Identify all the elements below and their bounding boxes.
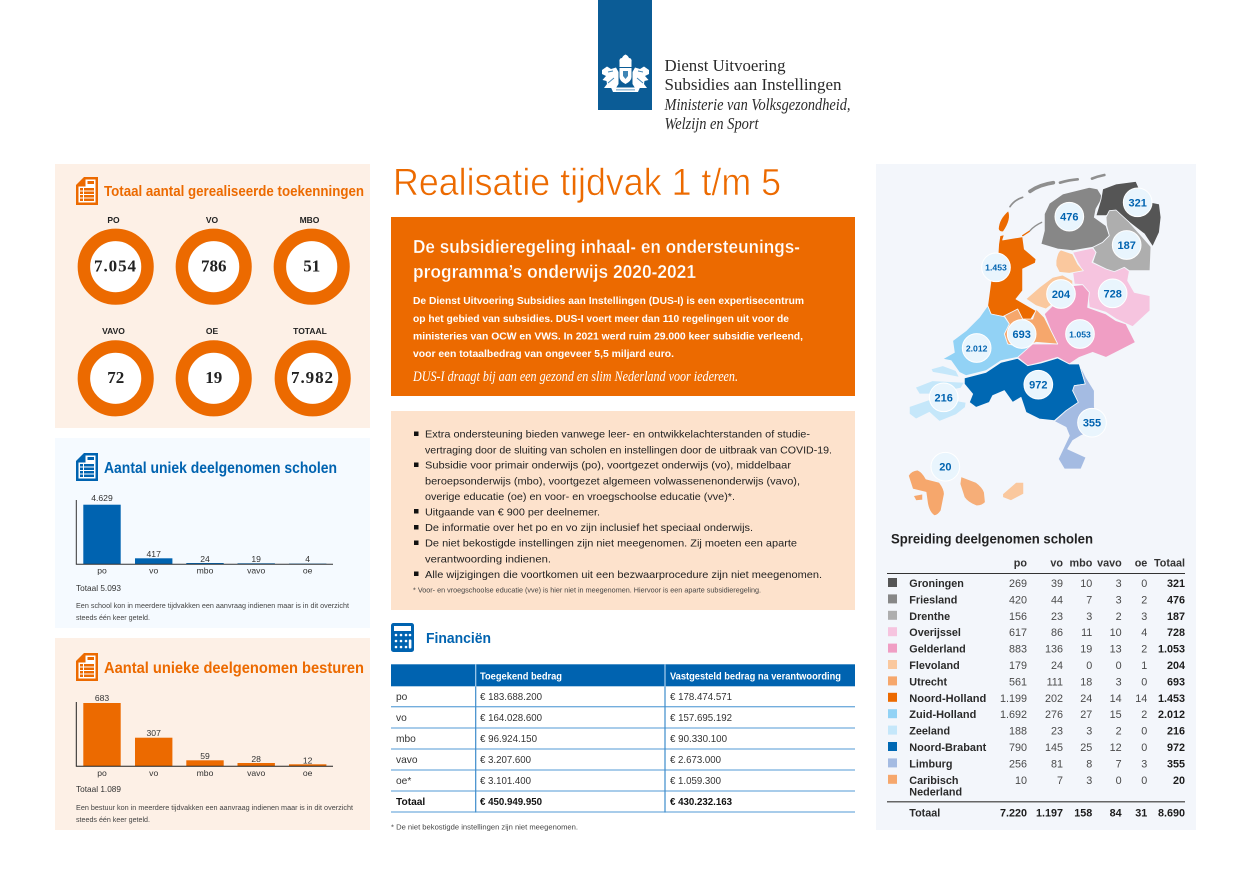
heading: regeling: De subsidieregeling inhaal- en ondersteunings-	[413, 236, 800, 257]
bar chart: scholen: vavo	[247, 566, 265, 576]
table: spreiding: 10	[1015, 775, 1027, 787]
table: spreiding: 2	[1141, 709, 1147, 721]
map value circles	[929, 188, 1152, 481]
table: spreiding: 0	[1141, 676, 1147, 688]
donut: PO	[84, 215, 148, 298]
map: Nederland: 1.453	[985, 263, 1007, 273]
table: financien: € 430.232.163	[670, 797, 732, 808]
icon: document blue	[76, 453, 98, 481]
heading: totaal aantal: Totaal aantal gerealiseerde toekenningen	[104, 183, 364, 200]
table: spreiding: 8.690	[1158, 808, 1185, 820]
table: spreiding: 216	[1167, 726, 1185, 738]
table: financien: € 157.695.192	[670, 713, 732, 724]
panel: spreiding	[876, 164, 1196, 830]
bar chart: besturen: 59	[200, 751, 210, 761]
donut: PO: 7.054	[94, 256, 136, 276]
bar chart: besturen: mbo	[197, 768, 214, 778]
logo text: organisation name: Ministerie van Volksgezondheid,	[664, 95, 850, 114]
donut: TOTAAL: TOTAAL	[293, 326, 327, 336]
table: spreiding: 0	[1116, 775, 1122, 787]
table: spreiding: Totaal	[1154, 558, 1185, 570]
text: totaal besturen: Totaal 1.089	[76, 784, 121, 794]
donut: OE	[182, 326, 246, 410]
table: spreiding: 2	[1116, 611, 1122, 623]
heading: regeling	[413, 236, 800, 282]
table: spreiding: 39	[1051, 578, 1063, 590]
table: spreiding: vo	[1050, 558, 1063, 570]
text: totaal scholen: Totaal 5.093	[76, 583, 121, 593]
table: spreiding: 693	[1167, 676, 1185, 688]
donut: VAVO	[84, 326, 148, 410]
table: spreiding: 14	[1110, 693, 1122, 705]
bullet list: Extra ondersteuning bieden vanwege leer- en ontwikkelachterstanden of studie-	[425, 430, 810, 441]
table: spreiding: 617	[1009, 627, 1027, 639]
table: spreiding: 10	[1110, 627, 1122, 639]
table: spreiding: 25	[1080, 742, 1092, 754]
table: spreiding: 136	[1045, 644, 1063, 656]
table: spreiding: 3	[1141, 611, 1147, 623]
table: financien: € 183.688.200	[480, 692, 542, 703]
panel: totaal aantal toekenningen	[55, 164, 370, 428]
table: spreiding: Friesland	[909, 594, 957, 606]
table: spreiding: 23	[1051, 611, 1063, 623]
table: spreiding: 202	[1045, 693, 1063, 705]
note: besturen: steeds één keer geteld.	[76, 815, 150, 824]
table: spreiding: 18	[1080, 676, 1092, 688]
table: spreiding: 13	[1110, 644, 1122, 656]
map: Nederland: 321	[1129, 197, 1147, 209]
table: spreiding: 0	[1141, 775, 1147, 787]
table: spreiding: 7.220	[1000, 808, 1027, 820]
donut: VO	[182, 215, 246, 298]
table: spreiding: 972	[1167, 742, 1185, 754]
table: spreiding: Drenthe	[909, 611, 950, 623]
table: spreiding: 81	[1051, 758, 1063, 770]
table: spreiding: 3	[1116, 676, 1122, 688]
table: spreiding: 20	[1173, 775, 1185, 787]
logo text: organisation name: Dienst Uitvoering	[664, 56, 786, 75]
logo: Rijksoverheid ribbon with crest	[598, 0, 652, 110]
table: spreiding: 3	[1086, 611, 1092, 623]
table: financien: € 164.028.600	[480, 713, 542, 724]
table: spreiding: Utrecht	[909, 676, 947, 688]
heading: scholen: Aantal uniek deelgenomen scholen	[104, 460, 337, 477]
bar chart: besturen	[76, 693, 333, 778]
bullet list: verantwoording indienen.	[425, 554, 551, 565]
table: spreiding: 1.197	[1036, 808, 1063, 820]
bar chart: besturen: po	[97, 768, 107, 778]
table: spreiding: 728	[1167, 627, 1185, 639]
map: Nederland: 204	[1052, 289, 1071, 301]
table: spreiding: 2	[1141, 644, 1147, 656]
bar chart: scholen: 24	[200, 554, 210, 564]
table: spreiding: mbo	[1070, 558, 1093, 570]
table: spreiding: 179	[1009, 660, 1027, 672]
map: Nederland: 216	[935, 392, 953, 404]
note: scholen: steeds één keer geteld.	[76, 613, 150, 622]
table: spreiding: 0	[1141, 742, 1147, 754]
panel: introductie oranje	[391, 217, 855, 396]
table: financien: € 2.673.000	[670, 755, 721, 766]
map: Nederland: 693	[1013, 329, 1031, 341]
bar chart: scholen	[76, 493, 333, 576]
logo text: organisation name	[664, 56, 850, 133]
bar chart: scholen: 417	[147, 549, 161, 559]
table: spreiding: Totaal	[909, 808, 940, 820]
table: spreiding: 4	[1141, 627, 1147, 639]
table: financien: Toegekend bedrag	[480, 672, 562, 682]
table: spreiding: 1.053	[1158, 644, 1185, 656]
table: spreiding: 3	[1086, 775, 1092, 787]
table: spreiding: 0	[1116, 660, 1122, 672]
icon: calculator	[391, 623, 414, 652]
donut: OE: 19	[205, 368, 222, 387]
note: scholen	[76, 601, 350, 622]
heading: besturen: Aantal unieke deelgenomen besturen	[104, 660, 364, 677]
panel: unieke scholen	[55, 438, 370, 628]
heading: financien: Financiën	[426, 630, 491, 647]
table: spreiding: 269	[1009, 578, 1027, 590]
footnote: financien: * De niet bekostigde instellingen zijn niet meegenomen.	[391, 822, 578, 832]
table: spreiding: 276	[1045, 709, 1063, 721]
map: Nederland: 187	[1118, 240, 1136, 252]
map: Nederland: 20	[939, 462, 951, 474]
bullet list: Uitgaande van € 900 per deelnemer.	[425, 508, 600, 519]
table: spreiding: 24	[1080, 693, 1092, 705]
logo text: organisation name: Subsidies aan Instellingen	[664, 75, 842, 94]
table: spreiding: 355	[1167, 758, 1185, 770]
table: financien	[391, 664, 855, 812]
map: Nederland: 476	[1060, 212, 1078, 224]
table: spreiding: 27	[1080, 709, 1092, 721]
table: spreiding: 321	[1167, 578, 1185, 590]
donut: MBO	[280, 215, 344, 298]
note: besturen	[76, 803, 354, 824]
table: spreiding: 2	[1141, 594, 1147, 606]
table: spreiding: 790	[1009, 742, 1027, 754]
table: spreiding: 3	[1116, 594, 1122, 606]
table: financien: po	[396, 692, 408, 703]
note: besturen: Een bestuur kon in meerdere tijdvakken een aanvraag indienen maar is in dit overzicht	[76, 803, 354, 812]
donut: OE: OE	[206, 326, 218, 336]
table: spreiding: 44	[1051, 594, 1063, 606]
table: spreiding: Nederland	[909, 786, 962, 798]
table: spreiding: Limburg	[909, 758, 952, 770]
bar chart: besturen: 12	[303, 756, 313, 766]
map: Nederland: 2.012	[966, 343, 988, 353]
table: spreiding: 10	[1080, 578, 1092, 590]
table: financien: Vastgesteld bedrag na verantwoording	[670, 672, 841, 682]
donut: VAVO: VAVO	[102, 326, 125, 336]
table: spreiding: 883	[1009, 644, 1027, 656]
table: spreiding: 145	[1045, 742, 1063, 754]
table: spreiding: 3	[1086, 726, 1092, 738]
wadden	[1010, 175, 1104, 236]
text: intro: op het gebied van subsidies. DUS-I voert meer dan 110 regelingen uit voor de	[413, 314, 789, 325]
map: Nederland	[908, 175, 1161, 516]
table: spreiding: 3	[1141, 758, 1147, 770]
donut: MBO: MBO	[300, 215, 320, 225]
donut: TOTAAL	[281, 326, 345, 410]
table: spreiding: 204	[1167, 660, 1185, 672]
donut: VAVO: 72	[107, 368, 124, 387]
bullet list: De niet bekostigde instellingen zijn niet meegenomen. Zij moeten een aparte	[425, 539, 797, 550]
table: spreiding: 15	[1110, 709, 1122, 721]
table: spreiding: 187	[1167, 611, 1185, 623]
icon: document orange	[76, 653, 98, 681]
bar chart: scholen: vo	[149, 566, 158, 576]
footnote: vve: * Voor- en vroegschoolse educatie (vve) is hier niet in meegenomen. Hiervoor is een aparte subsidieregeling.	[413, 586, 761, 594]
table: spreiding: Groningen	[909, 578, 964, 590]
table: spreiding: po	[1014, 558, 1027, 570]
bullet list	[414, 430, 832, 581]
bullet list: overige educatie (oe) en voor- en vroegschoolse educatie (vve)*.	[425, 492, 735, 503]
table: spreiding: 1	[1141, 660, 1147, 672]
title: Realisatie tijdvak 1 t/m 5	[393, 162, 781, 204]
table: spreiding: 158	[1074, 808, 1092, 820]
table: spreiding: 19	[1080, 644, 1092, 656]
table: spreiding: 1.453	[1158, 693, 1185, 705]
table: spreiding: vavo	[1097, 558, 1122, 570]
bar chart: scholen: 19	[251, 554, 261, 564]
donut: TOTAAL: 7.982	[291, 368, 333, 387]
text: intro: voor een totaalbedrag van ongeveer 5,5 miljard euro.	[413, 349, 674, 360]
table: spreiding: 31	[1135, 808, 1147, 820]
panel: unieke besturen	[55, 638, 370, 830]
bar chart: scholen: 4	[305, 554, 310, 564]
donut: MBO: 51	[303, 256, 320, 276]
table: spreiding: 11	[1081, 627, 1092, 639]
map: Nederland: 1.053	[1069, 329, 1091, 339]
bar chart: besturen: vo	[149, 768, 158, 778]
logo text: organisation name: Welzijn en Sport	[664, 114, 759, 133]
bullet list: beroepsonderwijs (mbo), voortgezet algemeen volwassenenonderwijs (vavo),	[425, 476, 800, 487]
bar chart: besturen: 683	[95, 693, 109, 703]
panel: toelichting	[391, 411, 855, 610]
table: spreiding: 23	[1051, 726, 1063, 738]
table: spreiding: Caribisch	[909, 775, 959, 787]
table: spreiding: 8	[1086, 758, 1092, 770]
table: spreiding: 1.199	[1000, 693, 1027, 705]
table: spreiding: 84	[1110, 808, 1122, 820]
bullet list: De informatie over het po en vo zijn inclusief het speciaal onderwijs.	[425, 523, 753, 534]
table: spreiding: 14	[1135, 693, 1147, 705]
bar chart: besturen: 28	[251, 754, 261, 764]
text: slogan: DUS-I draagt bij aan een gezond en slim Nederland voor iedereen.	[412, 369, 738, 385]
table: spreiding: 420	[1009, 594, 1027, 606]
bar chart: scholen: mbo	[197, 566, 214, 576]
table: spreiding: 156	[1009, 611, 1027, 623]
table: spreiding: Noord-Holland	[909, 693, 986, 705]
bar chart: besturen: vavo	[247, 768, 265, 778]
bullet list: vertraging door de sluiting van scholen en instellingen door de uitbraak van COVID-19.	[425, 445, 832, 456]
table: spreiding: 2.012	[1158, 709, 1185, 721]
table: financien: € 178.474.571	[670, 692, 732, 703]
bullet list: Alle wijzigingen die voortkomen uit een bezwaarprocedure zijn niet meegenomen.	[425, 570, 822, 581]
table: spreiding: 0	[1141, 578, 1147, 590]
table: spreiding: 86	[1051, 627, 1063, 639]
table: financien: € 90.330.100	[670, 734, 727, 745]
table: spreiding: 7	[1116, 758, 1122, 770]
table: spreiding: Zuid-Holland	[909, 709, 976, 721]
heading: spreiding: Spreiding deelgenomen scholen	[891, 532, 1093, 546]
bar chart: scholen: oe	[303, 566, 313, 576]
text: intro: De Dienst Uitvoering Subsidies aan Instellingen (DUS-I) is een expertisecentrum	[413, 296, 804, 307]
table: financien: € 1.059.300	[670, 776, 721, 787]
table: spreiding: 256	[1009, 758, 1027, 770]
donut: VO: 786	[201, 256, 226, 276]
table: spreiding: 7	[1057, 775, 1063, 787]
note: scholen: Een school kon in meerdere tijdvakken een aanvraag indienen maar is in dit overzicht	[76, 601, 350, 610]
table: spreiding: 24	[1051, 660, 1063, 672]
bullet list: Subsidie voor primair onderwijs (po), voortgezet onderwijs (vo), middelbaar	[425, 461, 792, 472]
table: financien: € 3.101.400	[480, 776, 531, 787]
table: spreiding: 476	[1167, 594, 1185, 606]
table: spreiding: Overijssel	[909, 627, 961, 639]
table: spreiding: Flevoland	[909, 660, 960, 672]
table: financien: mbo	[396, 734, 416, 745]
table: spreiding: Zeeland	[909, 726, 950, 738]
table: spreiding: 561	[1009, 676, 1027, 688]
table: spreiding: oe	[1135, 558, 1147, 570]
heading: regeling: programma’s onderwijs 2020-2021	[413, 261, 696, 282]
table: spreiding: Gelderland	[909, 644, 966, 656]
table: spreiding: 2	[1116, 726, 1122, 738]
table: financien: € 3.207.600	[480, 755, 531, 766]
icon: document orange	[76, 177, 98, 205]
table: spreiding	[887, 558, 1185, 820]
table: financien: € 450.949.950	[480, 797, 542, 808]
map: Nederland: 728	[1104, 288, 1122, 300]
map: Nederland: 972	[1029, 380, 1047, 392]
table: financien: vo	[396, 713, 407, 724]
table: spreiding: 188	[1009, 726, 1027, 738]
icon: crest	[602, 54, 649, 92]
table: spreiding: 3	[1116, 578, 1122, 590]
table: spreiding: 7	[1086, 594, 1092, 606]
bar chart: scholen: 4.629	[91, 493, 113, 503]
donut: PO: PO	[107, 215, 120, 225]
table: spreiding: 1.692	[1000, 709, 1027, 721]
table: spreiding: 0	[1141, 726, 1147, 738]
table: spreiding: 12	[1110, 742, 1122, 754]
table: financien: vavo	[396, 755, 418, 766]
donut: VO: VO	[206, 215, 219, 225]
text: intro: ministeries van OCW en VWS. In 2021 werd ruim 29.000 keer subsidie verleend,	[413, 332, 803, 342]
table: financien: € 96.924.150	[480, 734, 537, 745]
bar chart: besturen: oe	[303, 768, 313, 778]
table: spreiding: 111	[1047, 676, 1063, 688]
bar chart: besturen: 307	[147, 728, 161, 738]
text: intro	[413, 296, 804, 360]
table: spreiding: 0	[1086, 660, 1092, 672]
table: financien: oe*	[396, 776, 411, 787]
table: spreiding: Noord-Brabant	[909, 742, 987, 754]
map: Nederland: 355	[1083, 418, 1101, 430]
table: financien: Totaal	[396, 797, 425, 808]
bar chart: scholen: po	[97, 566, 107, 576]
